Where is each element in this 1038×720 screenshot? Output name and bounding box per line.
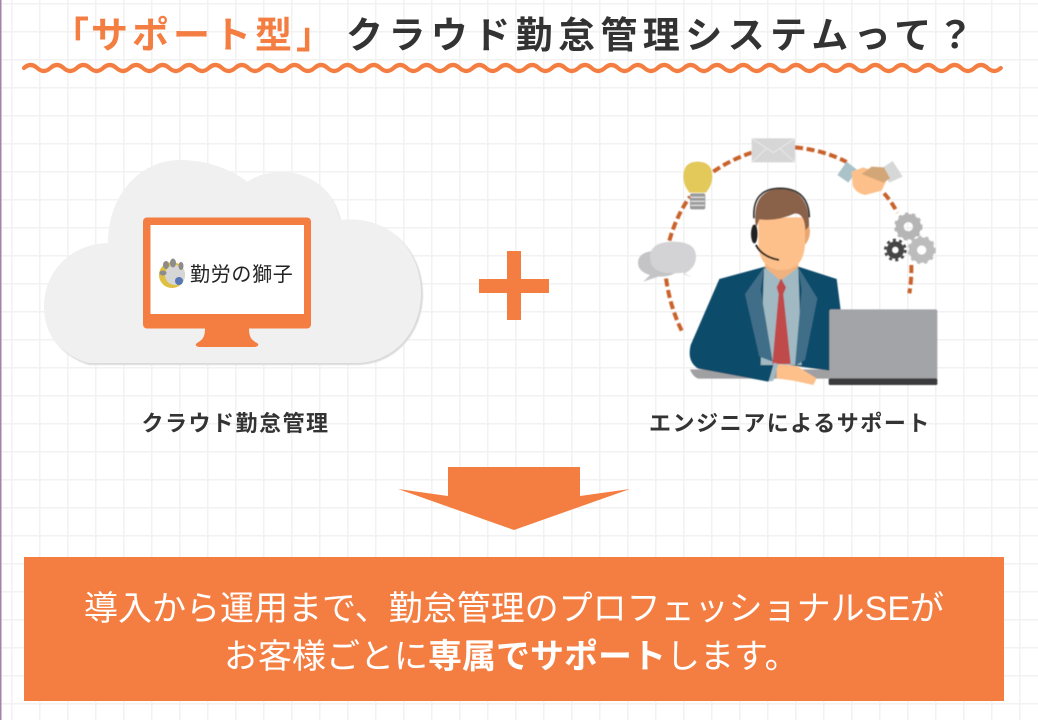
callout xyxy=(24,557,1004,701)
dashed orbit xyxy=(666,147,911,331)
icon: light bulb xyxy=(683,162,712,209)
wavy underline xyxy=(24,65,1001,71)
ear xyxy=(803,225,810,245)
title xyxy=(52,15,979,56)
jacket xyxy=(690,267,841,382)
icon: monitor xyxy=(143,218,311,347)
tie xyxy=(772,278,791,364)
callout: お客様ごとに専属でサポートします。 xyxy=(224,638,799,676)
icon: cloud xyxy=(44,160,423,365)
title: サポート型 xyxy=(91,15,296,56)
label: cloud attendance: クラウド勤怠管理 xyxy=(142,411,330,436)
lapels xyxy=(745,267,773,362)
headset xyxy=(754,188,809,218)
title: 「 xyxy=(52,15,89,56)
icon: envelope xyxy=(752,138,795,162)
icon: gears xyxy=(885,214,934,263)
illustration: support engineer xyxy=(638,138,937,385)
face xyxy=(758,217,805,270)
neck xyxy=(765,253,798,281)
desk xyxy=(690,369,830,379)
hand xyxy=(777,364,817,385)
icon: speech bubbles xyxy=(638,242,696,282)
logo: 勤労の獅子 xyxy=(159,258,294,288)
title: 」 xyxy=(296,15,333,56)
person xyxy=(690,188,841,385)
cloud with monitor xyxy=(44,160,423,365)
callout: 導入から運用まで、勤怠管理のプロフェッショナルSEが xyxy=(84,590,944,628)
shirt xyxy=(761,268,802,365)
logo: 勤労の獅子: 勤労の獅子 xyxy=(190,263,294,286)
icon: handshake xyxy=(837,161,903,195)
label: engineer support: エンジニアによるサポート xyxy=(649,411,931,436)
down arrow xyxy=(398,467,630,530)
title: クラウド勤怠管理システムって？ xyxy=(346,15,979,56)
hair xyxy=(755,189,809,230)
laptop xyxy=(829,309,937,385)
plus sign xyxy=(479,251,549,320)
